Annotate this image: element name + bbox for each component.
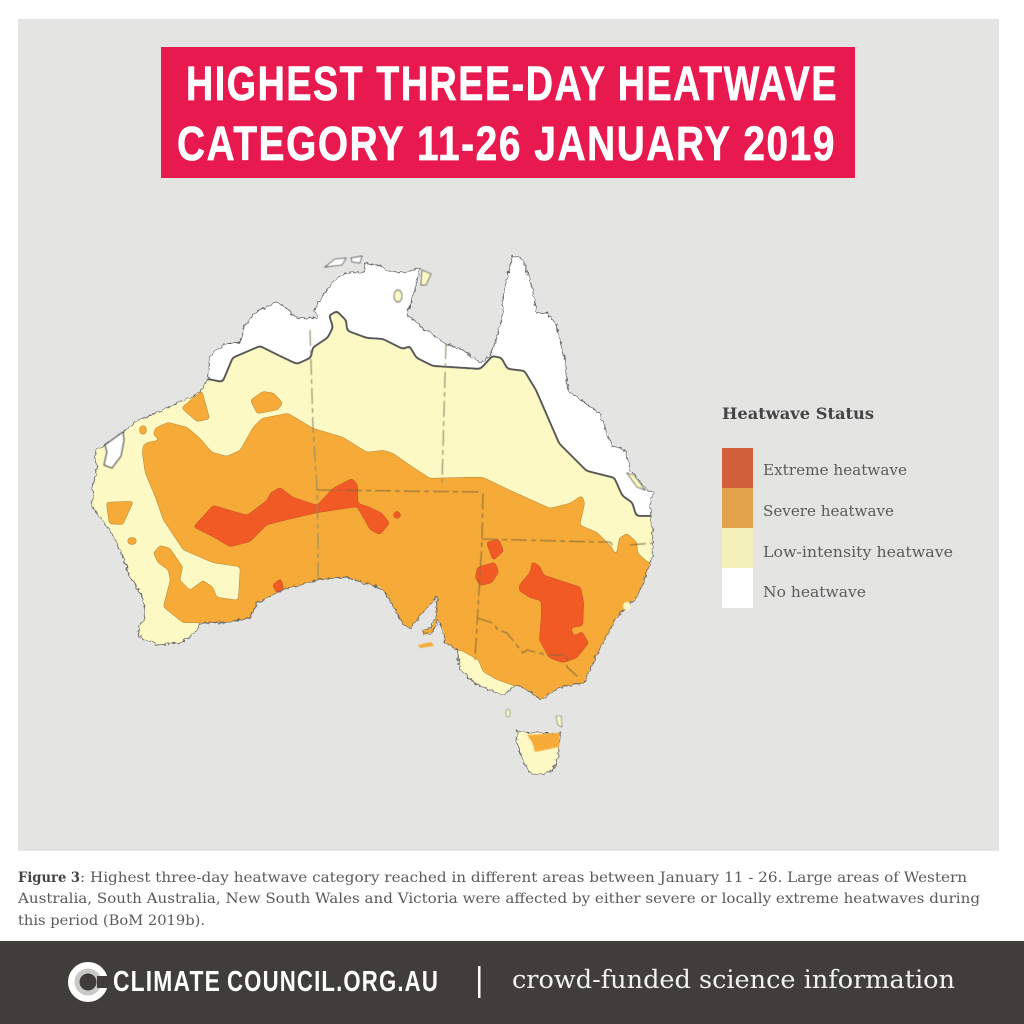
extreme heatwave: small patches [272, 511, 504, 594]
website [113, 966, 439, 998]
state borders [310, 330, 653, 677]
coastline [92, 255, 653, 775]
tagline: crowd-funded science information [512, 965, 955, 994]
background panel [18, 19, 999, 851]
legend: low-intensity: Low-intensity heatwave [763, 543, 953, 561]
title banner: CATEGORY 11-26 JANUARY 2019 [177, 118, 836, 171]
Tasmania severe area [527, 733, 560, 752]
severe heatwave area [142, 413, 680, 705]
legend [722, 404, 953, 608]
legend: Heatwave Status [722, 404, 874, 423]
Kangaroo Island [418, 642, 434, 648]
map of Australia [90, 254, 654, 776]
title banner [161, 47, 855, 178]
caption: this period (BoM 2019b). [18, 913, 205, 929]
Shark Bay [104, 432, 124, 468]
title banner: HIGHEST THREE-DAY HEATWAVE [186, 58, 838, 111]
caption: Australia, South Australia, New South Wales and Victoria were affected by either severe or locally extreme heatwaves during [17, 891, 980, 907]
caption: : Highest three-day heatwave category reached in different areas between January 11 - 26. Large areas of Western [80, 870, 967, 886]
legend: severe: Severe heatwave [763, 502, 894, 520]
website: COUNCIL.ORG.AU [227, 966, 439, 998]
legend: extreme [722, 448, 907, 488]
land base: no heatwave [92, 255, 653, 775]
caption [17, 870, 980, 929]
legend: extreme: Extreme heatwave [763, 461, 907, 479]
legend: none [722, 568, 866, 608]
extreme heatwave: central band [193, 478, 390, 547]
legend: none: No heatwave [763, 583, 866, 601]
legend: severe [722, 488, 894, 528]
website: CLIMATE [113, 966, 221, 998]
severe patches: north-west and west [106, 390, 283, 545]
footer bar [0, 941, 1024, 1024]
caption: Figure 3 [18, 870, 80, 886]
logo icon [72, 966, 109, 998]
low-intensity heatwave area [92, 311, 653, 775]
extreme heatwave: south-east [519, 561, 589, 663]
legend: low-intensity [722, 528, 953, 568]
coastal islands [325, 256, 645, 727]
